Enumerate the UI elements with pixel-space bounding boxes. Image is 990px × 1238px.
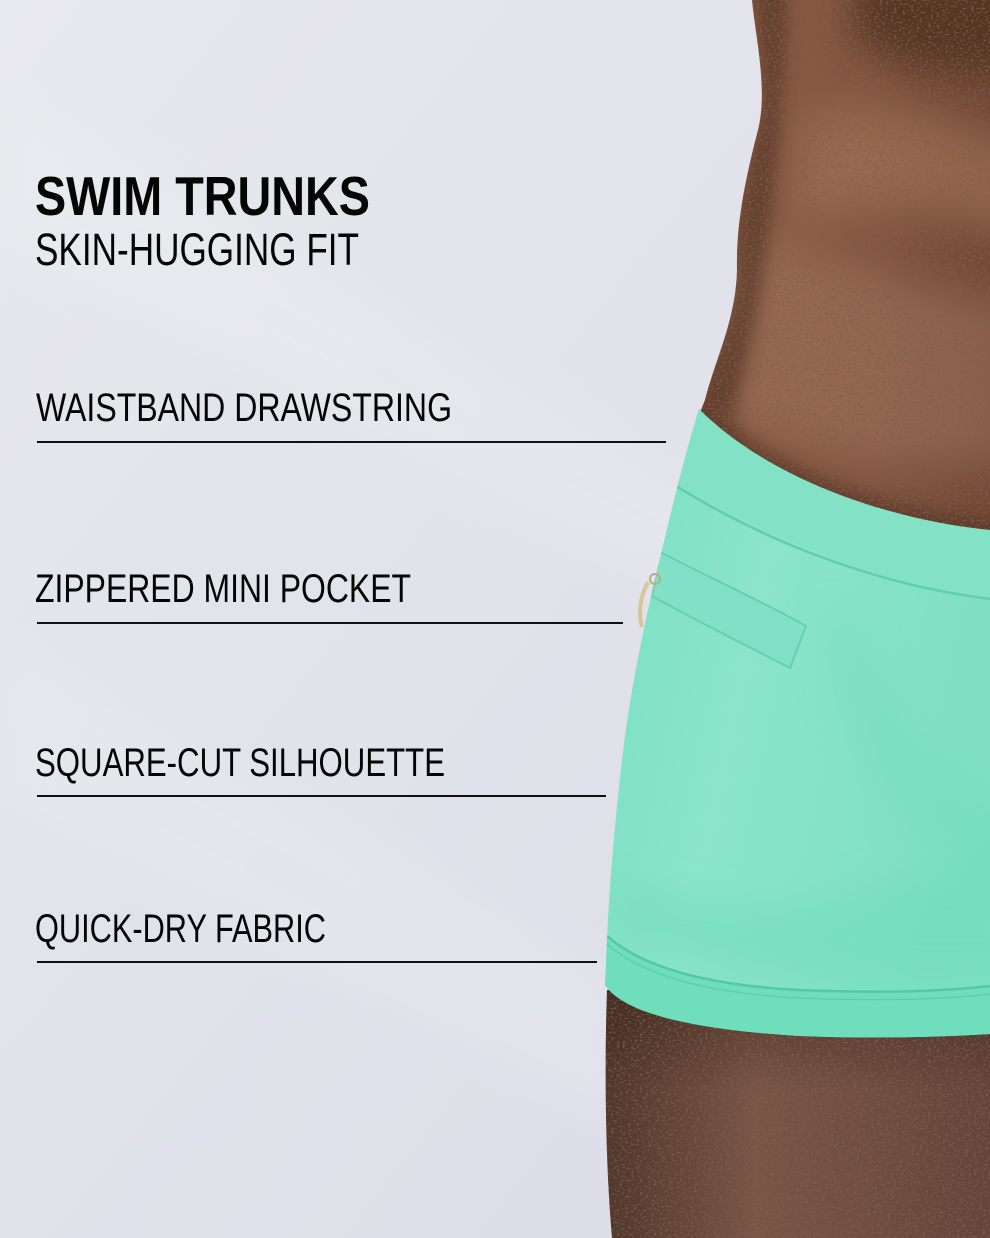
subtitle: SKIN-HUGGING FIT: [35, 224, 359, 275]
torso: [700, 0, 990, 530]
feature: square-cut silhouette: SQUARE-CUT SILHOUETTE: [35, 741, 445, 785]
trunks: [600, 400, 990, 1050]
pocket welt: [652, 552, 806, 668]
photo: model wearing swim trunks: [600, 0, 990, 1238]
thigh: [600, 980, 990, 1238]
fabric shading: [630, 888, 990, 970]
waistband: [678, 409, 989, 538]
feature: quick-dry fabric: QUICK-DRY FABRIC: [35, 907, 326, 951]
zipper: [640, 574, 660, 627]
hem: [600, 936, 990, 1040]
title: [35, 165, 370, 275]
feature: zippered mini pocket: ZIPPERED MINI POCKET: [35, 567, 411, 611]
title: SWIM TRUNKS: [35, 165, 370, 227]
feature: waistband drawstring: WAISTBAND DRAWSTRING: [36, 386, 452, 430]
